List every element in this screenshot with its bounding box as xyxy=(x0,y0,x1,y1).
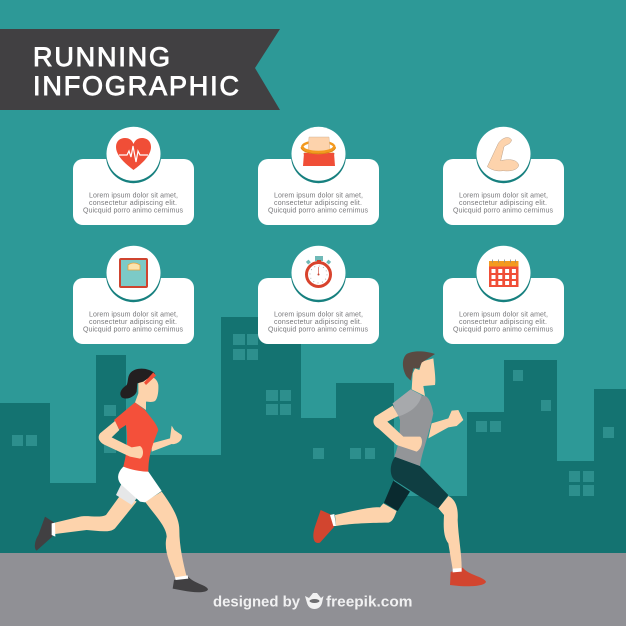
text block: consectetur adipiscing elit. xyxy=(459,319,547,326)
text block: Quicquid porro animo cernimus xyxy=(453,208,554,214)
man runner xyxy=(313,351,486,586)
text block: Quicquid porro animo cernimus xyxy=(268,326,368,334)
text block: consectetur adipiscing elit. xyxy=(274,200,362,207)
panel: waist xyxy=(258,127,379,225)
city skyline xyxy=(0,317,626,556)
woman runner xyxy=(35,369,208,592)
text block: Lorem ipsum dolor sit amet, xyxy=(89,312,178,318)
footer credit xyxy=(213,593,412,610)
title text: INFOGRAPHIC xyxy=(33,71,239,101)
ground xyxy=(0,553,626,626)
text block: consectetur adipiscing elit. xyxy=(89,200,177,207)
text block xyxy=(268,192,368,214)
text block: Quicquid porro animo cernimus xyxy=(453,326,554,334)
text block: consectetur adipiscing elit. xyxy=(274,319,362,326)
icon: heart with pulse xyxy=(116,138,151,170)
title text xyxy=(33,42,239,101)
panel: strength xyxy=(443,127,564,225)
footer credit: designed by xyxy=(213,594,301,610)
icon: freepik logo xyxy=(305,593,324,609)
text block xyxy=(453,192,554,214)
text block: Lorem ipsum dolor sit amet, xyxy=(459,312,548,318)
text block xyxy=(83,192,184,214)
text block xyxy=(268,312,368,334)
icon: stopwatch xyxy=(306,256,331,286)
icon: bathroom scale xyxy=(120,259,147,287)
text block: Quicquid porro animo cernimus xyxy=(268,208,368,214)
footer credit: freepik.com xyxy=(326,594,412,610)
text block: consectetur adipiscing elit. xyxy=(459,200,547,207)
panel: heart rate xyxy=(73,127,194,225)
text block xyxy=(83,312,184,334)
panel: schedule xyxy=(443,246,564,344)
text block: Quicquid porro animo cernimus xyxy=(83,326,184,334)
text block xyxy=(453,312,554,334)
text block: consectetur adipiscing elit. xyxy=(89,319,177,326)
icon: calendar xyxy=(489,260,518,287)
panel: time xyxy=(258,246,379,344)
icon: flexed arm xyxy=(487,138,519,171)
title text: RUNNING xyxy=(33,42,170,72)
text block: Quicquid porro animo cernimus xyxy=(83,208,184,214)
icon: waist with measuring tape xyxy=(301,137,336,166)
panel: weight xyxy=(73,246,194,344)
title banner xyxy=(0,29,280,110)
text block: Lorem ipsum dolor sit amet, xyxy=(274,192,363,200)
text block: Lorem ipsum dolor sit amet, xyxy=(89,192,178,200)
text block: Lorem ipsum dolor sit amet, xyxy=(274,312,363,318)
text block: Lorem ipsum dolor sit amet, xyxy=(459,192,548,200)
